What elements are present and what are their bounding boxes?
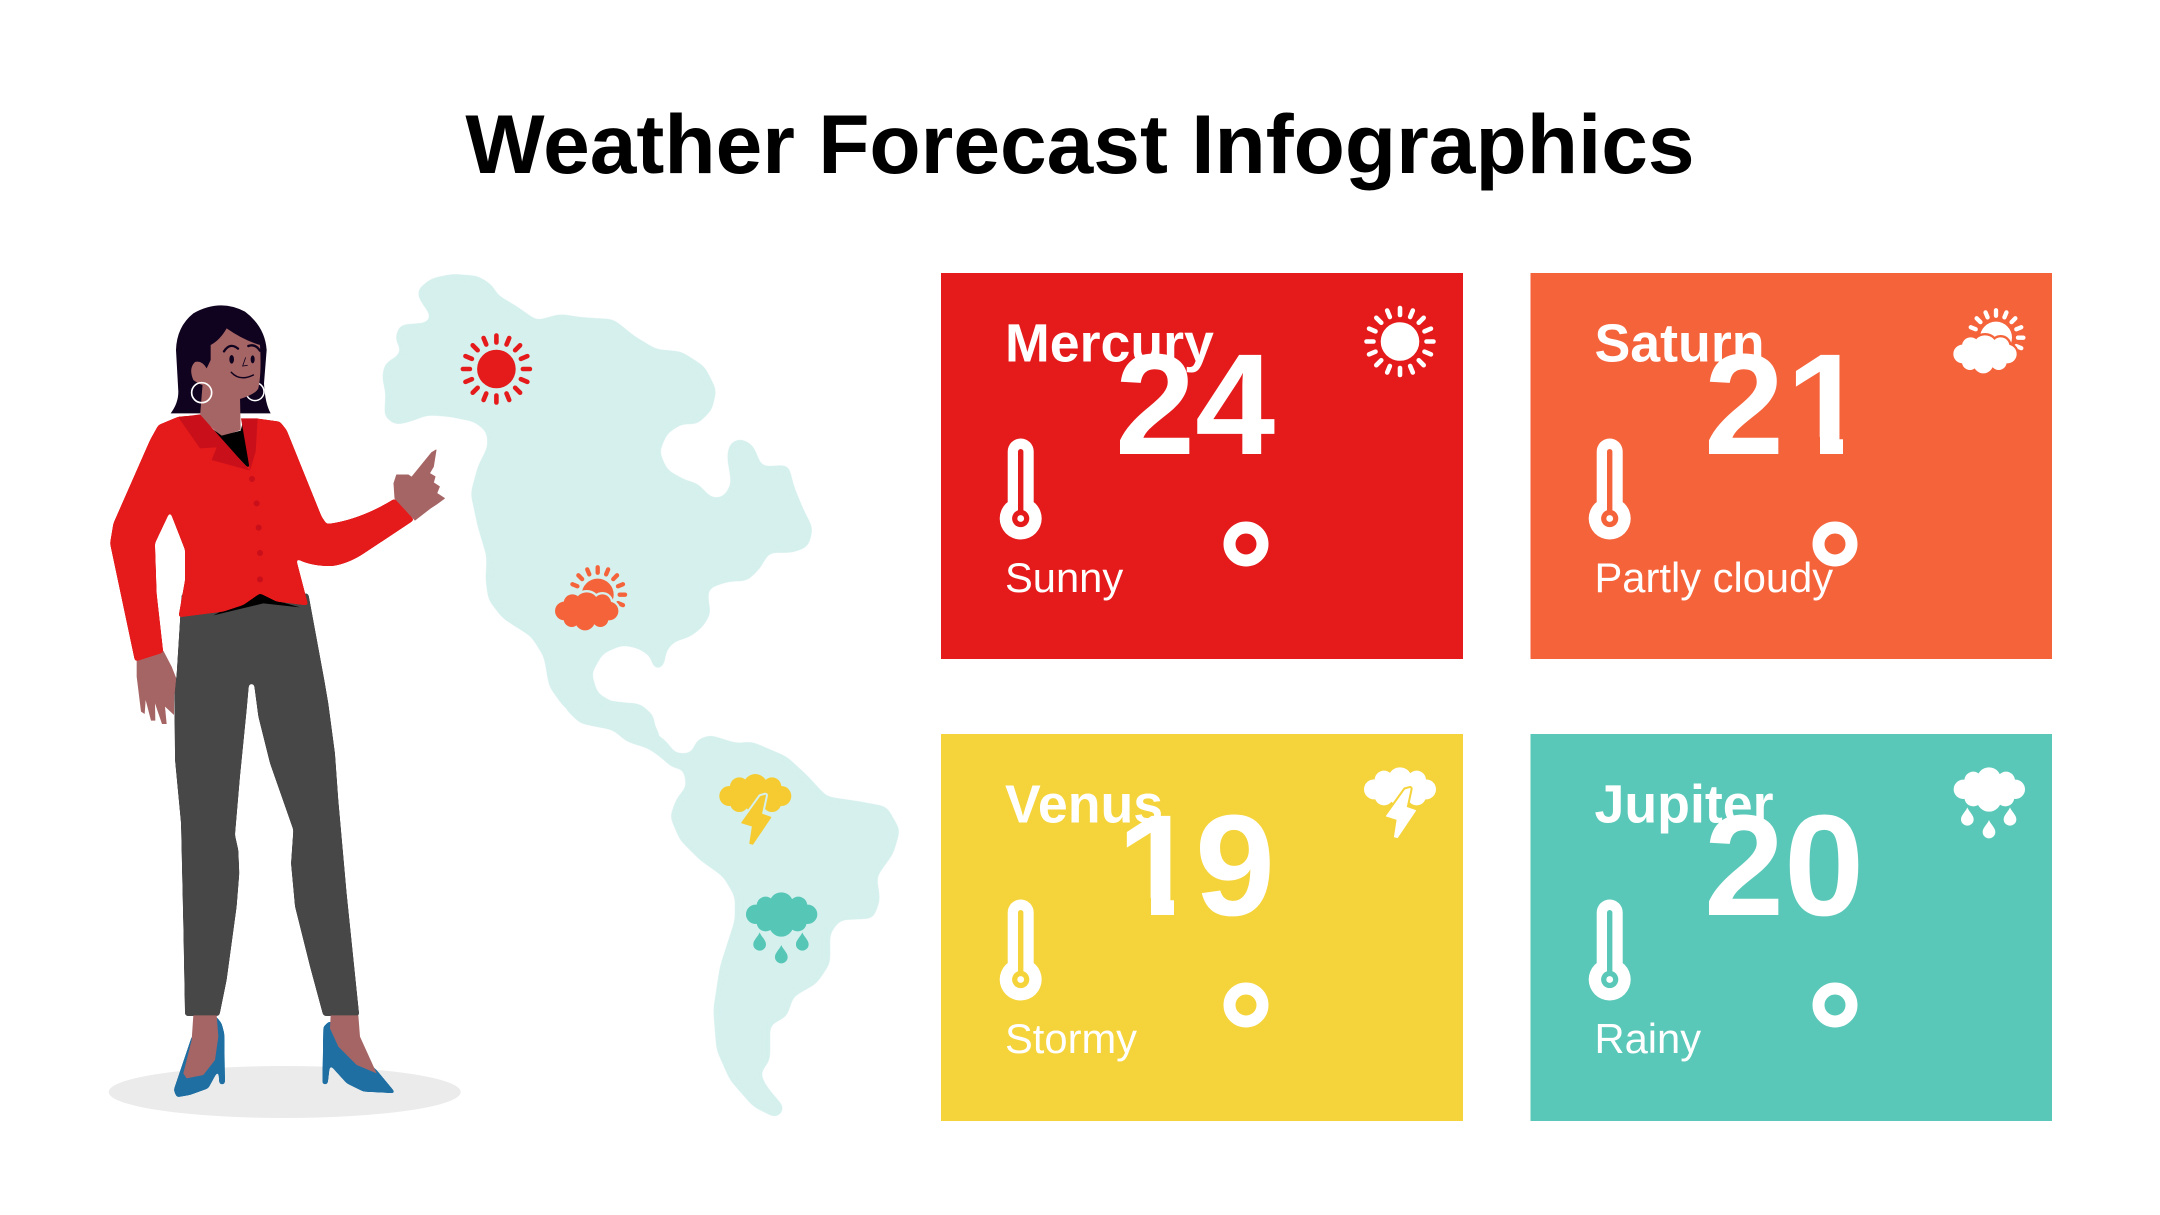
panel: Jupiter <box>1530 734 2052 1121</box>
temperature: 20: 20 <box>1704 785 1864 946</box>
right lapel <box>241 418 258 471</box>
digit foot trim <box>1786 437 1891 456</box>
temperature: 19: 9 <box>1195 785 1275 946</box>
right foot <box>330 1015 377 1073</box>
right earring <box>246 383 264 401</box>
degree ring <box>1230 528 1262 560</box>
presenter shadow <box>109 1066 461 1118</box>
presenter illustration <box>110 305 444 1097</box>
condition: Rainy: Rainy <box>1594 1015 1701 1062</box>
map: South America <box>560 700 900 1118</box>
temperature: 24: 24 <box>1115 324 1275 485</box>
neck <box>200 383 241 437</box>
left hand <box>137 651 179 724</box>
left foot <box>183 1015 218 1078</box>
degree ring <box>1230 988 1262 1022</box>
icon: partly cloudy <box>1953 310 2023 373</box>
icon: thermometer <box>1589 900 1631 1000</box>
temperature: 19: 1 <box>1117 785 1197 946</box>
degree ring <box>1818 528 1852 560</box>
map: North America <box>382 274 813 740</box>
pointing hand <box>394 450 444 520</box>
jacket <box>110 415 414 662</box>
icon: sun <box>1366 308 1434 375</box>
left shoe <box>174 1016 225 1097</box>
heading: Mercury: Mercury <box>1005 314 1214 374</box>
icon: thermometer <box>1000 900 1042 1000</box>
heading: Jupiter: Jupiter <box>1594 774 1774 834</box>
icon: storm <box>1364 767 1436 837</box>
condition: Stormy: Stormy <box>1005 1015 1137 1062</box>
icon: rain <box>1954 767 2025 838</box>
waist shadow <box>213 592 300 615</box>
panel: Venus <box>941 734 1463 1121</box>
degree ring <box>1818 988 1852 1022</box>
heading: Saturn: Saturn <box>1594 314 1765 374</box>
title: Weather Forecast Infographics <box>465 97 1695 191</box>
left earring <box>192 383 212 403</box>
temperature: 19 <box>1117 785 1275 946</box>
condition: Partly cloudy: Partly cloudy <box>1594 554 1833 601</box>
jacket buttons <box>249 476 263 582</box>
left lapel <box>178 414 250 471</box>
map of the Americas <box>382 274 900 1118</box>
hair <box>171 305 271 413</box>
map icon: sun <box>463 336 530 402</box>
map icon: storm <box>719 774 791 844</box>
black top <box>205 423 251 471</box>
facial features <box>224 345 260 378</box>
panel: Saturn <box>1530 273 2052 659</box>
map icon: rain <box>746 892 817 963</box>
panel: Mercury <box>941 273 1463 659</box>
temperature: 21: 21 <box>1704 324 1866 485</box>
right shoe <box>322 1021 396 1093</box>
map icon: partly cloudy <box>555 567 625 630</box>
heading: Venus: Venus <box>1005 774 1163 834</box>
icon: thermometer <box>1589 438 1631 540</box>
icon: thermometer <box>1000 438 1042 540</box>
condition: Sunny: Sunny <box>1005 554 1123 601</box>
trousers <box>174 593 359 1016</box>
face <box>191 328 261 400</box>
